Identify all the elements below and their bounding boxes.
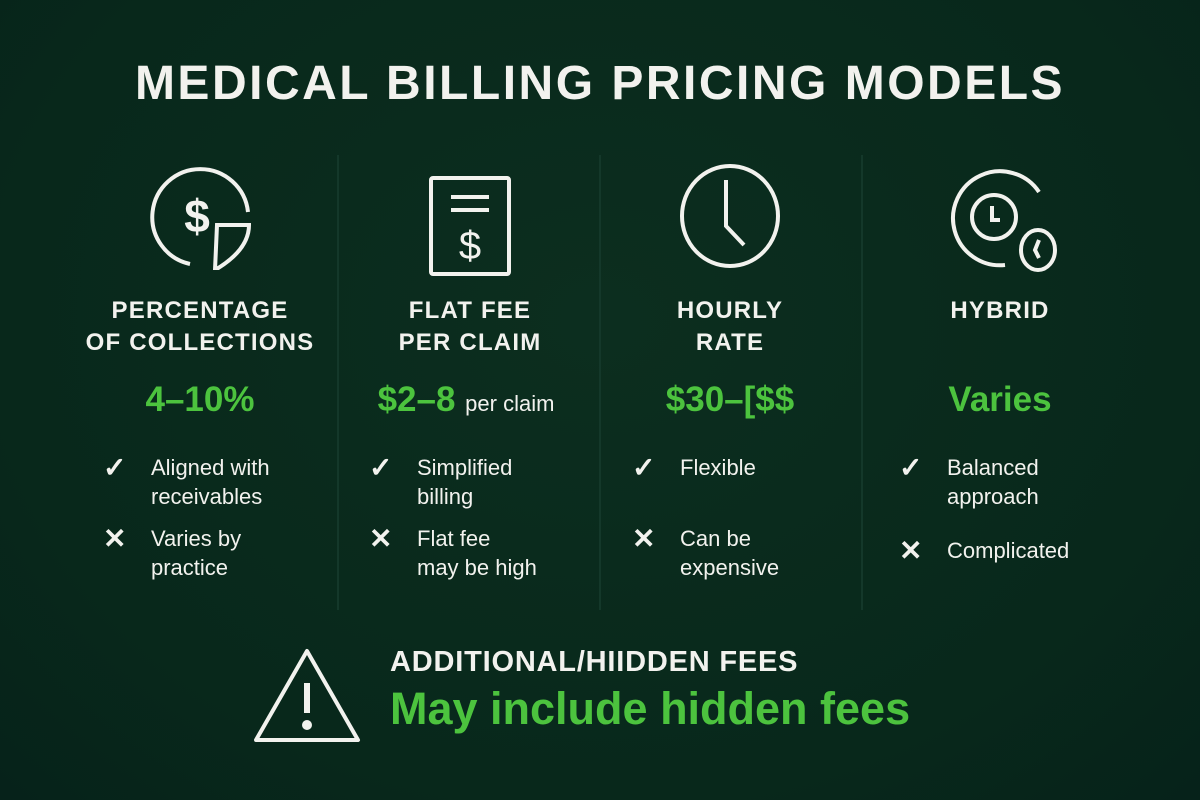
heading: FLAT FEE — [409, 297, 531, 324]
heading: HOURLY — [677, 297, 783, 324]
price: $30–[$$ — [666, 380, 794, 419]
panel: hybrid: ✕ — [899, 535, 922, 566]
heading: OF COLLECTIONS — [86, 329, 314, 356]
panel: hybrid — [899, 169, 1069, 566]
price: Varies — [948, 380, 1052, 419]
icon: dollar coin: $ — [184, 190, 210, 242]
icon: warning triangle — [254, 648, 360, 742]
price: 4–10% — [146, 380, 254, 419]
pro: receivables — [151, 484, 262, 509]
panel: hybrid: ✓ — [899, 452, 922, 483]
icon: coin with clocks — [950, 169, 1057, 272]
pro: Simplified — [417, 455, 512, 480]
heading: PERCENTAGE — [112, 297, 288, 324]
icon: dollar coin — [150, 167, 251, 270]
heading: RATE — [696, 329, 764, 356]
con — [103, 523, 242, 580]
panel: hourly rate: ✕ — [632, 523, 655, 554]
heading — [677, 297, 783, 356]
icon: invoice: $ — [459, 224, 481, 268]
heading — [86, 297, 314, 356]
title: MEDICAL BILLING PRICING MODELS — [135, 57, 1065, 110]
heading: PER CLAIM — [399, 329, 541, 356]
panel: hourly rate — [632, 164, 794, 580]
con: expensive — [680, 555, 779, 580]
callout: hidden fees: May include hidden fees — [390, 683, 910, 734]
con: Varies by — [151, 526, 241, 551]
pro: Balanced — [947, 455, 1039, 480]
pro — [369, 452, 512, 509]
callout: hidden fees: ADDITIONAL/HIIDDEN FEES — [390, 646, 798, 678]
con: Can be — [680, 526, 751, 551]
pro — [899, 452, 1039, 509]
con: may be high — [417, 555, 537, 580]
con: practice — [151, 555, 228, 580]
pro: billing — [417, 484, 473, 509]
con: Complicated — [947, 538, 1069, 563]
heading: HYBRID — [950, 297, 1050, 324]
pro — [103, 452, 270, 509]
con: Flat fee — [417, 526, 490, 551]
pro: Aligned with — [151, 455, 270, 480]
icon: invoice — [429, 176, 511, 276]
panel: hourly rate: ✓ — [632, 452, 655, 483]
panel: flat fee per claim: ✕ — [369, 523, 392, 554]
con — [369, 523, 537, 580]
heading — [399, 297, 541, 356]
callout: hidden fees — [390, 646, 910, 734]
panel: flat fee per claim — [369, 176, 554, 580]
panel: percentage of collections: ✓ — [103, 452, 126, 483]
pro: Flexible — [680, 455, 756, 480]
price: $2–8 per claim — [378, 380, 554, 419]
pro: approach — [947, 484, 1039, 509]
pro — [632, 452, 756, 483]
icon: clock — [680, 164, 780, 268]
con — [632, 523, 779, 580]
panel: percentage of collections — [86, 167, 314, 580]
con — [899, 535, 1069, 566]
panel: flat fee per claim: ✓ — [369, 452, 392, 483]
panel: percentage of collections: ✕ — [103, 523, 126, 554]
